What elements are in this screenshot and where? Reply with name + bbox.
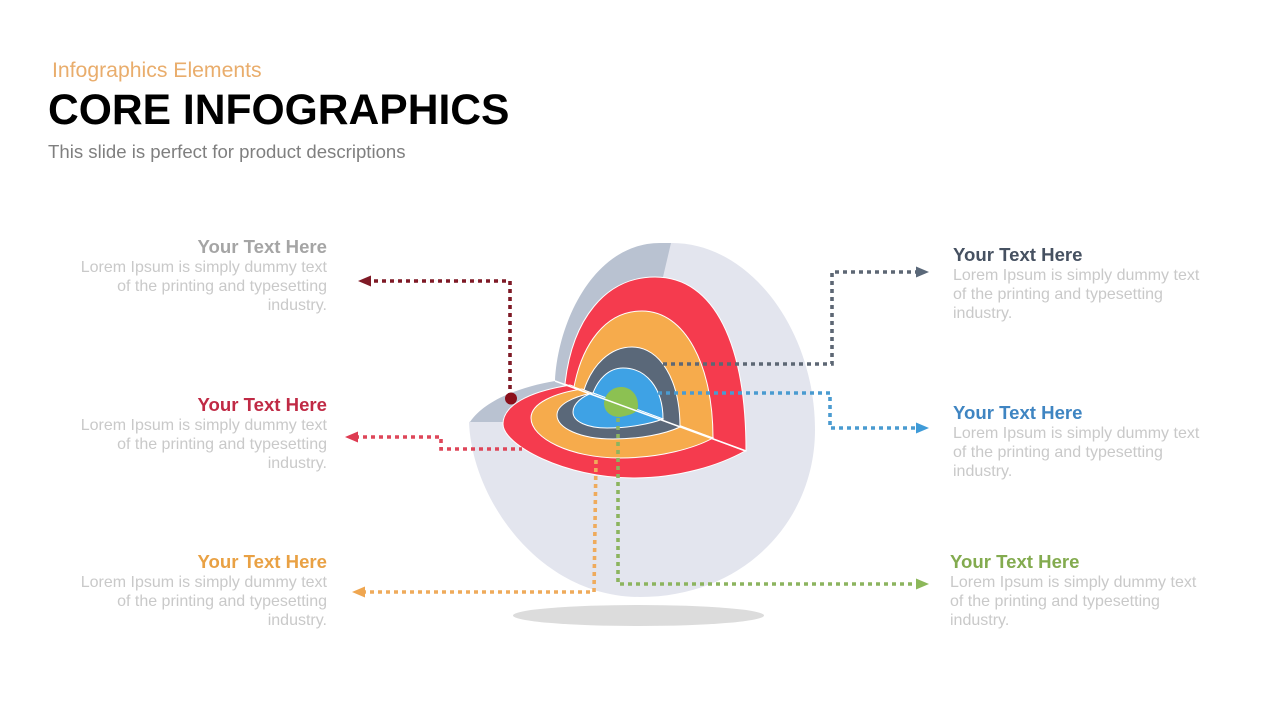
text block: bottom right: industry. (950, 612, 1009, 629)
connector: red (345, 432, 522, 449)
dark slate layer (557, 347, 680, 439)
orange layer (531, 311, 713, 458)
text block: middle right: Your Text Here (953, 402, 1083, 423)
subtitle: This slide is perfect for product descriptions (48, 141, 406, 162)
text block: bottom right: Lorem Ipsum is simply dummy text (950, 574, 1196, 591)
text block: middle left: Lorem Ipsum is simply dummy text (81, 417, 327, 434)
text block: top right (953, 244, 1200, 322)
text block: top left: Your Text Here (197, 236, 327, 257)
outer sphere body (469, 243, 815, 597)
connector: blue (658, 393, 929, 434)
text block: middle right: industry. (953, 463, 1012, 480)
text block: top left: Lorem Ipsum is simply dummy text (81, 259, 327, 276)
text block: bottom left: Lorem Ipsum is simply dummy text (81, 574, 327, 591)
red layer (503, 277, 746, 478)
blue layer (573, 368, 663, 428)
connector: orange (352, 458, 596, 598)
text block: bottom left (81, 551, 327, 629)
text block: middle left (81, 394, 327, 472)
sphere cut faces (470, 243, 671, 422)
green inner core (604, 387, 638, 417)
text block: middle right: of the printing and typesetting (953, 444, 1163, 461)
cut line (555, 381, 746, 451)
title: CORE INFOGRAPHICS (48, 86, 509, 134)
text block: bottom right: Your Text Here (950, 551, 1080, 572)
connector: green (618, 418, 929, 590)
text block: middle left: of the printing and typesetting (117, 436, 327, 453)
text block: top right: of the printing and typesetting (953, 286, 1163, 303)
text block: bottom left: industry. (268, 612, 327, 629)
text block: bottom right (950, 551, 1196, 629)
text block: top left (81, 236, 327, 314)
text block: bottom left: of the printing and typesetting (117, 593, 327, 610)
text block: middle right: Lorem Ipsum is simply dummy text (953, 425, 1199, 442)
text block: top left: of the printing and typesetting (117, 278, 327, 295)
connector: slate (663, 266, 929, 364)
text block: top right: industry. (953, 305, 1012, 322)
text block: top right: Your Text Here (953, 244, 1083, 265)
text block: top left: industry. (268, 297, 327, 314)
text block: top right: Lorem Ipsum is simply dummy text (953, 267, 1199, 284)
eyebrow heading: Infographics Elements (52, 59, 262, 82)
text block: bottom right: of the printing and typesetting (950, 593, 1160, 610)
text block: bottom left: Your Text Here (197, 551, 327, 572)
shadow under sphere (513, 605, 764, 626)
text block: middle right (953, 402, 1200, 480)
connector: maroon (358, 276, 517, 404)
text block: middle left: industry. (268, 455, 327, 472)
text block: middle left: Your Text Here (197, 394, 327, 415)
